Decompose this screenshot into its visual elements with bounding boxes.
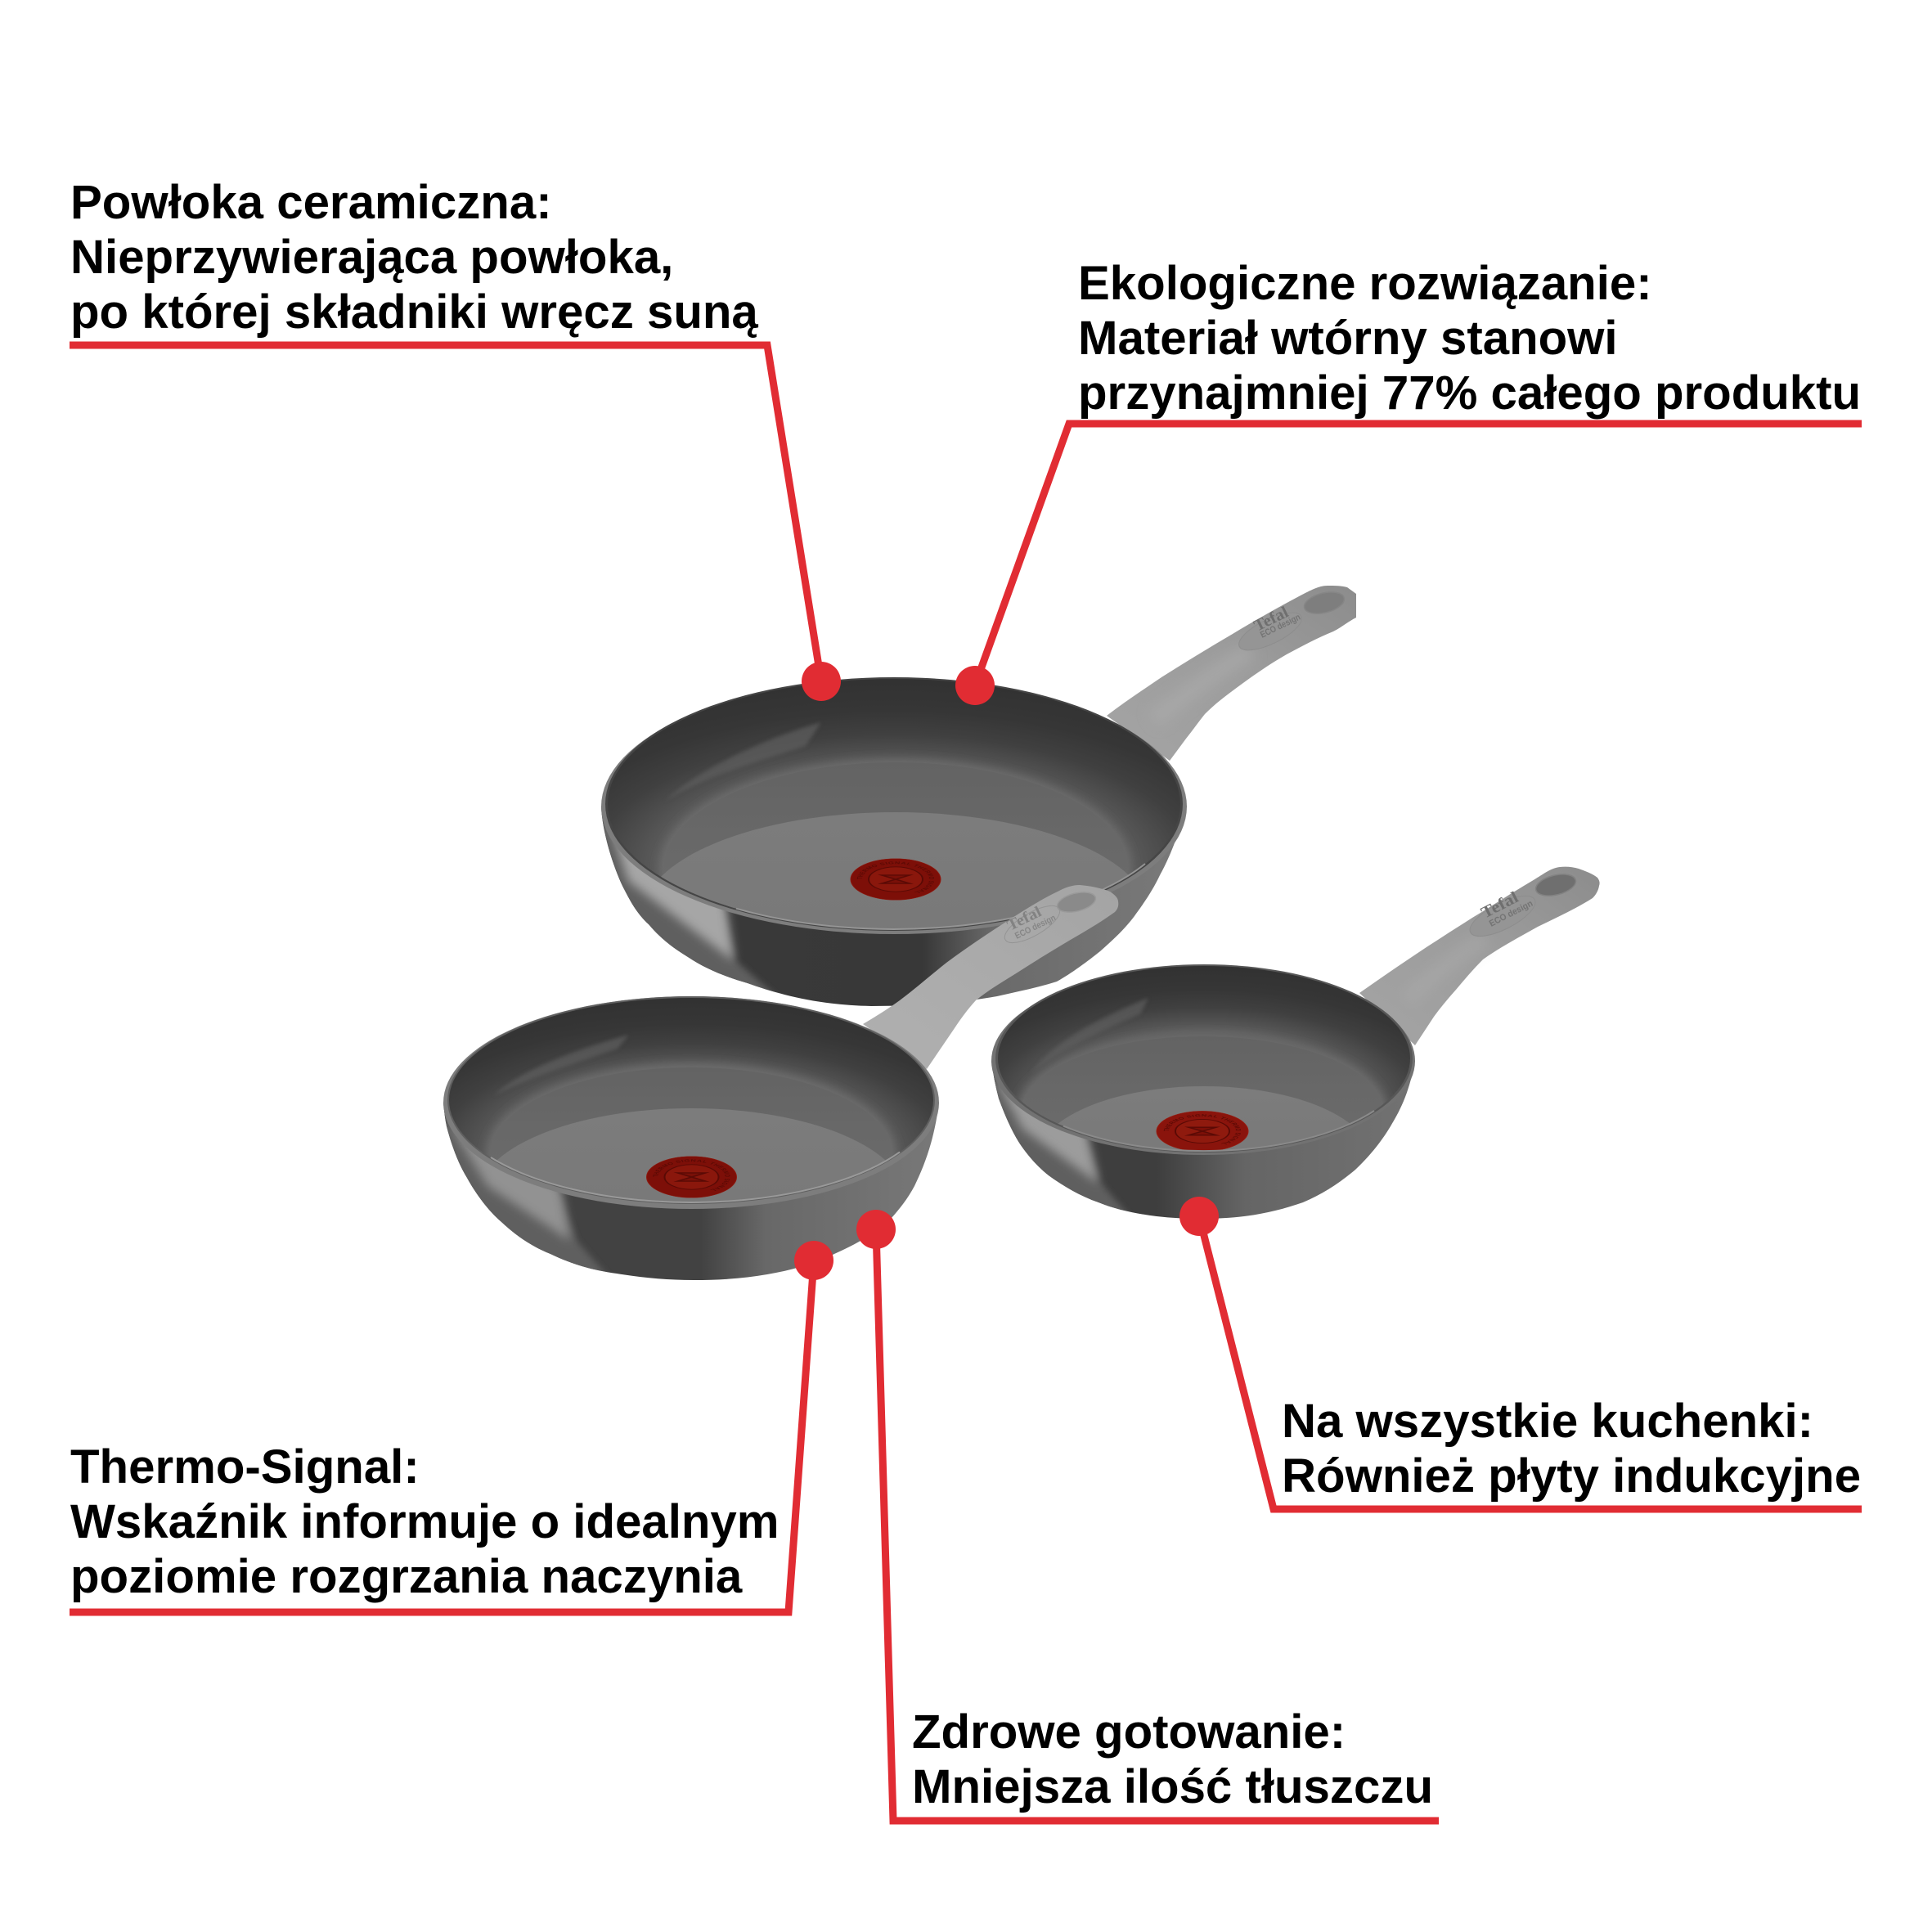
callout: Thermo-Signal xyxy=(70,1241,833,1612)
callout text: healthy cooking: Zdrowe gotowanie: xyxy=(912,1705,1346,1759)
callout: Zdrowe gotowanie xyxy=(856,1210,1439,1821)
callout text: Thermo-Signal xyxy=(70,1440,780,1603)
callout text: Thermo-Signal: poziomie rozgrzania naczynia xyxy=(70,1550,743,1603)
small pan rim and interior xyxy=(991,964,1415,1155)
callout text: ceramic coating: Powłoka ceramiczna: xyxy=(70,176,552,229)
large pan handle: Tefal xyxy=(1251,603,1292,635)
marker dot: ceramic coating xyxy=(802,662,841,701)
callout text: all hobs xyxy=(1282,1395,1861,1503)
leader line: ecological solution xyxy=(975,424,1862,685)
callout text: all hobs: Również płyty indukcyjne xyxy=(1282,1449,1861,1503)
callout text: ecological solution: Materiał wtórny stanowi xyxy=(1078,312,1618,365)
medium pan handle: ECO design xyxy=(1013,913,1058,941)
callout text: ceramic coating xyxy=(70,176,758,339)
callout text: ceramic coating: Nieprzywierająca powłoka, xyxy=(70,231,673,284)
leader line: healthy cooking xyxy=(876,1229,1439,1821)
callout text: all hobs: Na wszystkie kuchenki: xyxy=(1282,1395,1813,1448)
medium pan handle xyxy=(863,885,1118,1069)
callout text: healthy cooking: Mniejsza ilość tłuszczu xyxy=(912,1760,1433,1813)
large pan handle: ECO design xyxy=(1259,613,1302,640)
medium pan handle: Tefal xyxy=(1004,903,1045,934)
large pan outer body xyxy=(597,802,1194,1010)
medium pan Thermo-Signal indicator: THERMO SIGNAL THERMO SIGNAL xyxy=(653,1159,730,1191)
medium pan outer body xyxy=(438,1096,945,1284)
leader line: Thermo-Signal xyxy=(70,1260,814,1612)
small pan Thermo-Signal indicator xyxy=(1157,1111,1248,1150)
marker dot: ecological solution xyxy=(955,666,995,705)
small pan Thermo-Signal indicator: THERMO SIGNAL THERMO SIGNAL xyxy=(1163,1114,1241,1145)
large pan rim and interior xyxy=(601,677,1187,934)
callout: Powłoka ceramiczna xyxy=(70,176,841,701)
callout: Ekologiczne rozwiązanie xyxy=(955,257,1862,705)
large pan Thermo-Signal indicator: THERMO SIGNAL THERMO SIGNAL xyxy=(857,861,934,893)
callout text: ecological solution: przynajmniej 77% całego produktu xyxy=(1078,366,1861,420)
callout text: ecological solution: Ekologiczne rozwiązanie: xyxy=(1078,257,1652,310)
medium frying pan xyxy=(443,885,1119,1280)
leader line: ceramic coating xyxy=(70,345,821,681)
callout text: ceramic coating: po której składniki wręcz suną xyxy=(70,285,758,339)
medium pan rim and interior xyxy=(443,996,939,1209)
infographic canvas xyxy=(70,183,1862,1824)
large pan Thermo-Signal indicator xyxy=(851,859,941,900)
callout text: ecological solution xyxy=(1078,257,1861,420)
callout text: Thermo-Signal: Wskaźnik informuje o idealnym xyxy=(70,1495,780,1548)
medium pan Thermo-Signal indicator xyxy=(646,1157,737,1197)
small pan handle xyxy=(1359,867,1600,1045)
small pan handle: ECO design xyxy=(1488,899,1534,929)
marker dot: all hobs xyxy=(1179,1197,1219,1236)
small pan outer body xyxy=(986,1055,1423,1223)
callout: Na wszystkie kuchenki xyxy=(1179,1197,1862,1509)
marker dot: healthy cooking xyxy=(856,1210,896,1249)
large frying pan xyxy=(577,586,1356,1042)
large pan handle xyxy=(1107,586,1356,761)
leader line: all hobs xyxy=(1199,1216,1862,1509)
callout text: Thermo-Signal: Thermo-Signal: xyxy=(70,1440,420,1494)
marker dot: Thermo-Signal xyxy=(794,1241,833,1280)
callout text: healthy cooking xyxy=(912,1705,1433,1813)
small frying pan xyxy=(964,867,1600,1245)
small pan handle: Tefal xyxy=(1478,888,1521,922)
